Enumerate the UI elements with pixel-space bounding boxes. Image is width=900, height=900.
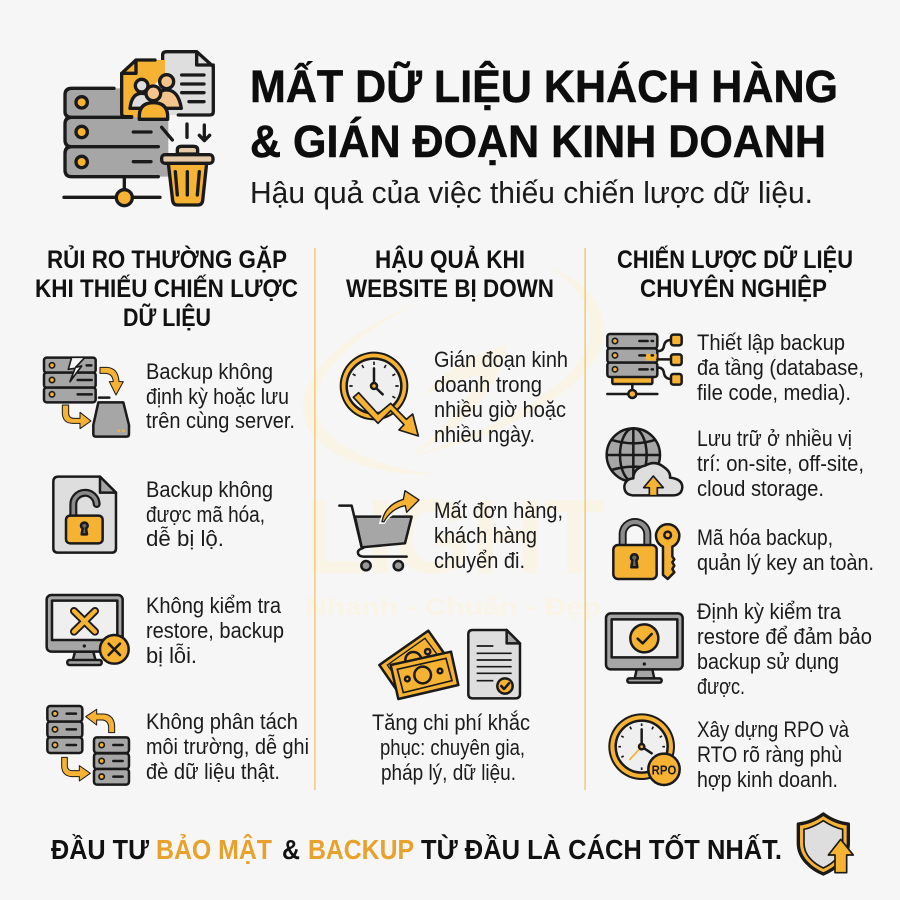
text: RPO and RTO (697, 717, 850, 792)
text: multiple storage locations: trí: on-site, off-site, (697, 451, 864, 476)
text: backup schedule: định kỳ hoặc lưu (146, 384, 289, 409)
text: unencrypted backup (146, 477, 273, 551)
text: RPO and RTO: hợp kinh doanh. (697, 767, 838, 792)
heading: consequences: WEBSITE BỊ DOWN (346, 275, 554, 303)
text: unencrypted backup: được mã hóa, (146, 502, 265, 527)
text: recovery costs: phục: chuyên gia, (380, 735, 525, 760)
watermark: logo and brand: Nhanh - Chuẩn - Đẹp (305, 594, 601, 621)
heading: data strategy: CHIẾN LƯỢC DỮ LIỆU (617, 244, 853, 274)
text: encrypt backups: Mã hóa backup, (697, 525, 833, 550)
title: MẤT DỮ LIỆU KHÁCH HÀNG (250, 61, 838, 112)
icon: padlock and key (613, 522, 679, 579)
text: restore not tested: bị lỗi. (146, 643, 197, 668)
text: multi-tier backup: file code, media). (697, 380, 851, 405)
footer message (51, 833, 782, 865)
footer message: BẢO MẬT (156, 833, 272, 865)
text: environments not separated: Không phân tách (146, 709, 298, 734)
heading: consequences: HẬU QUẢ KHI (375, 244, 525, 274)
text: business interruption: nhiều giờ hoặc (434, 397, 566, 422)
heading: common risks (35, 244, 298, 332)
text: backup schedule (146, 359, 295, 433)
watermark: logo and brand: LIGHT (305, 478, 605, 596)
text: encrypt backups: quản lý key an toàn. (697, 550, 874, 575)
icon: clock with falling arrow (340, 352, 418, 436)
icon: shield with up arrow (798, 814, 853, 874)
text: restore not tested: restore, backup (146, 618, 284, 643)
panel: consequences when website is down (339, 244, 568, 785)
heading: consequences (346, 244, 554, 303)
text: recovery costs (372, 710, 530, 785)
title (250, 61, 838, 167)
heading: common risks: DỮ LIỆU (123, 302, 211, 332)
icon: monitor with check (606, 613, 683, 683)
text: scheduled restore tests (697, 599, 872, 699)
icon: multi-tier backup server (607, 334, 682, 398)
text: scheduled restore tests: được. (697, 674, 745, 699)
footer message: BACKUP (308, 834, 414, 865)
column dividers (314, 248, 586, 790)
panel: common risks (35, 244, 309, 785)
text: unencrypted backup: dễ bị lộ. (146, 526, 224, 551)
icon: monitor with error (47, 595, 129, 665)
icon: unlocked file (53, 477, 116, 553)
text: RPO and RTO: Xây dựng RPO và (697, 717, 850, 742)
text: business interruption: nhiều ngày. (434, 422, 535, 447)
text: multiple storage locations (697, 426, 864, 501)
text: lost orders: Mất đơn hàng, (434, 498, 563, 523)
text: multiple storage locations: cloud storage. (697, 476, 824, 501)
text: multi-tier backup: đa tầng (database, (697, 355, 864, 380)
heading: data strategy (617, 244, 853, 303)
title: & GIÁN ĐOẠN KINH DOANH (250, 116, 826, 167)
panel: professional data strategy (606, 244, 874, 792)
text: environments not separated: môi trường, dễ ghi (146, 734, 309, 759)
icon: server, customer files and trash (64, 52, 213, 206)
icon: money and document (379, 630, 520, 699)
icon: broken server and drive (44, 357, 129, 437)
icon: clock with RPO badge (608, 713, 680, 785)
text: RPO and RTO: RTO rõ ràng phù (697, 742, 842, 767)
text: recovery costs: Tăng chi phí khắc (372, 710, 530, 735)
icon: clock with RPO badge: RPO (652, 762, 676, 777)
text: unencrypted backup: Backup không (146, 477, 273, 502)
text: multi-tier backup: Thiết lập backup (697, 330, 845, 355)
icon: globe and cloud (607, 428, 682, 496)
text: business interruption (434, 347, 568, 447)
subtitle: Hậu quả của việc thiếu chiến lược dữ liệu. (250, 175, 813, 210)
text: backup schedule: Backup không (146, 359, 273, 384)
text: scheduled restore tests: Định kỳ kiểm tra (697, 599, 842, 624)
heading: data strategy: CHUYÊN NGHIỆP (640, 273, 827, 303)
text: scheduled restore tests: backup sử dụng (697, 649, 839, 674)
text: backup schedule: trên cùng server. (146, 408, 295, 433)
text: business interruption: Gián đoạn kinh (434, 347, 568, 372)
icon: shopping cart with exit arrow (339, 491, 419, 570)
text: restore not tested: Không kiểm tra (146, 593, 282, 618)
text: environments not separated (146, 709, 309, 784)
icon: servers not separated (47, 706, 129, 785)
heading: common risks: RỦI RO THƯỜNG GẶP (47, 244, 287, 274)
text: recovery costs: pháp lý, dữ liệu. (381, 760, 516, 785)
footer message: & (282, 834, 300, 865)
text: restore not tested (146, 593, 284, 668)
text: lost orders (434, 498, 563, 573)
text: lost orders: khách hàng (434, 523, 537, 548)
text: business interruption: doanh trong (434, 372, 542, 397)
text: multiple storage locations: Lưu trữ ở nhiều vị (697, 426, 852, 451)
footer message: TỪ ĐẦU LÀ CÁCH TỐT NHẤT. (421, 833, 782, 865)
text: encrypt backups (697, 525, 874, 575)
heading: common risks: KHI THIẾU CHIẾN LƯỢC (35, 274, 298, 303)
footer message: ĐẦU TƯ (51, 834, 150, 865)
text: lost orders: chuyển đi. (434, 548, 525, 573)
text: environments not separated: đè dữ liệu thật. (146, 759, 280, 784)
text: scheduled restore tests: restore để đảm bảo (697, 624, 872, 649)
watermark: logo and brand (303, 268, 605, 621)
text: multi-tier backup (697, 330, 864, 405)
